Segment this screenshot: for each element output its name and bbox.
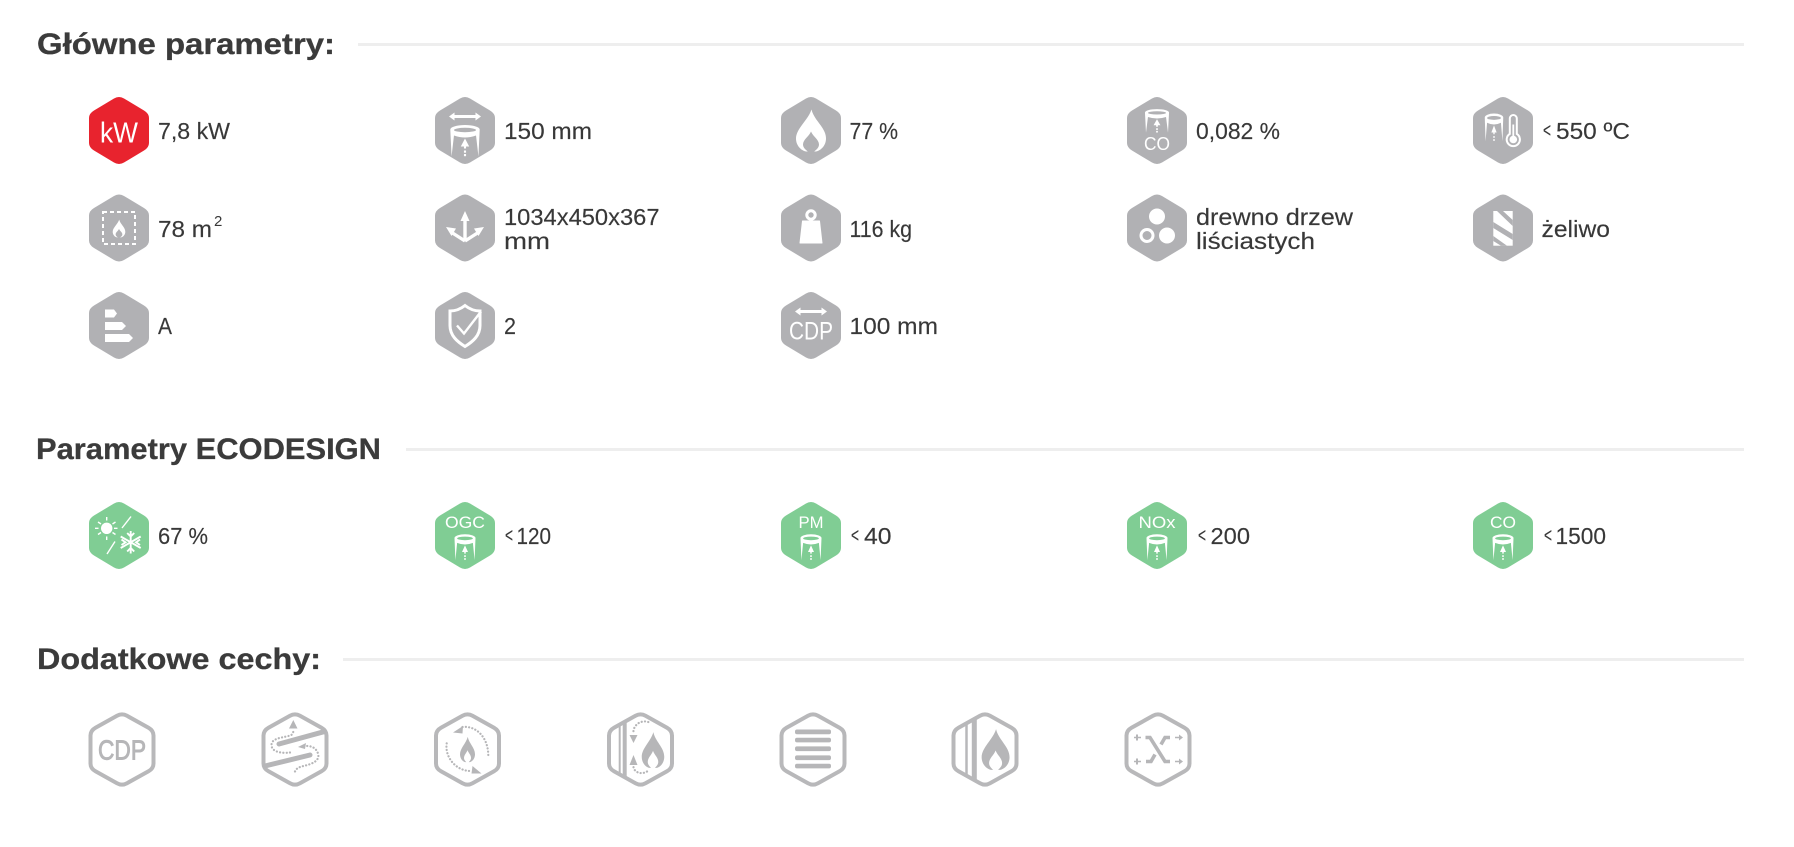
item: wymiary (435, 194, 660, 262)
value: <120 (505, 523, 551, 549)
item: CO 0,082 % (1127, 97, 1280, 164)
value: 116 kg: 116 kg (850, 216, 912, 242)
value: 77 %: 77 % (850, 118, 898, 144)
icon: grate bars (782, 714, 844, 785)
icon: flue diameter (435, 97, 495, 164)
value: <40: 40 (864, 523, 892, 549)
icon: secondary combustion circulation (436, 714, 499, 785)
icon: CO chimney: CO (1144, 134, 1170, 154)
icon: CDP outline: CDP (98, 734, 146, 766)
icon: PM chimney: PM (798, 513, 824, 532)
value: <1500: 1500 (1556, 523, 1606, 549)
value: <40: < (851, 525, 859, 547)
icon: flame (781, 97, 841, 164)
item: klasa bezpieczeństwa 2 (435, 292, 516, 359)
value: 100 mm: 100 mm (850, 313, 938, 339)
item: klasa energetyczna A (89, 292, 173, 359)
heading: parametry ecodesign: Parametry ECODESIGN (36, 433, 381, 466)
value: <1500: < (1544, 525, 1552, 547)
icon: chimney with thermometer (1473, 97, 1533, 164)
item: sprawność sezonowa 67 % (89, 502, 208, 569)
item: moc 7,8 kW (89, 97, 230, 164)
value: A: A (158, 313, 173, 339)
item: średnica 150 mm (435, 97, 592, 164)
icon: shield with check (435, 292, 495, 359)
icon: energy class bars (89, 292, 149, 359)
icon: kW red hexagon: kW (100, 118, 139, 150)
item: temperatura spalin (1473, 97, 1630, 164)
value: <40 (851, 523, 892, 549)
icon: flue gas path (264, 714, 326, 785)
icon: air wash glass (609, 714, 672, 785)
icon: CO chimney green: CO (1490, 513, 1516, 532)
value: 78 m2: 78 m (158, 216, 212, 242)
item: CDP 100 mm (781, 292, 938, 359)
icon: wood logs (1127, 194, 1187, 262)
icon: CDP diameter: CDP (789, 318, 833, 346)
icon: air flow regulation (1126, 714, 1190, 785)
item: paliwo (1127, 194, 1353, 262)
heading: dodatkowe cechy: Dodatkowe cechy: (37, 643, 321, 676)
value: drewno drzew liściastych (1196, 204, 1353, 254)
panel: dodatkowe cechy (37, 643, 1744, 785)
value: 1034x450x367 mm: 1034x450x367 (504, 204, 660, 230)
item: CO (1473, 502, 1606, 569)
value: 67 %: 67 % (158, 523, 208, 549)
value: żeliwo: żeliwo (1542, 216, 1610, 242)
value: <200: 200 (1210, 523, 1250, 549)
item: sprawność 77 % (781, 97, 898, 164)
value: <120: < (505, 525, 513, 547)
value: drewno drzew liściastych: drewno drzew (1196, 204, 1353, 230)
item: powierzchnia 78 m2 (89, 194, 222, 262)
icon: OGC chimney: OGC (445, 513, 485, 532)
icon: heated area (89, 194, 149, 262)
value: <200: < (1198, 525, 1206, 547)
icon: kW red hexagon (89, 97, 149, 164)
icon: NOx chimney: NOx (1138, 513, 1176, 532)
item: PM (781, 502, 892, 569)
heading: główne parametry: Główne parametry: (37, 28, 335, 61)
value: drewno drzew liściastych: liściastych (1196, 228, 1315, 254)
icon: cast iron bar (1473, 194, 1533, 262)
value: 1034x450x367 mm: mm (504, 228, 550, 254)
value: <550 ºC: 550 ºC (1556, 118, 1630, 144)
value: 7,8 kW: 7,8 kW (158, 118, 230, 144)
value: <550 ºC: < (1543, 120, 1551, 142)
item: NOx (1127, 502, 1250, 569)
value: 0,082 %: 0,082 % (1196, 118, 1280, 144)
panel: parametry ecodesign (36, 433, 1744, 569)
icon: CDP diameter (781, 292, 841, 359)
value: 1034x450x367 mm (504, 204, 660, 254)
item: OGC (435, 502, 551, 569)
icon: CDP outline (90, 714, 154, 785)
icon: sun and snowflake (89, 502, 149, 569)
item: masa 116 kg (781, 194, 912, 262)
icon: glass and flame (954, 714, 1016, 785)
value: 150 mm: 150 mm (504, 118, 592, 144)
icon: three-axis dimensions (435, 194, 495, 262)
value: 78 m2: 2 (214, 213, 222, 230)
panel: główne parametry (37, 28, 1744, 359)
value: 2: 2 (504, 313, 516, 339)
icon: CO chimney (1127, 97, 1187, 164)
item: materiał żeliwo (1473, 194, 1610, 262)
value: <120: 120 (516, 523, 551, 549)
icon: weight (781, 194, 841, 262)
